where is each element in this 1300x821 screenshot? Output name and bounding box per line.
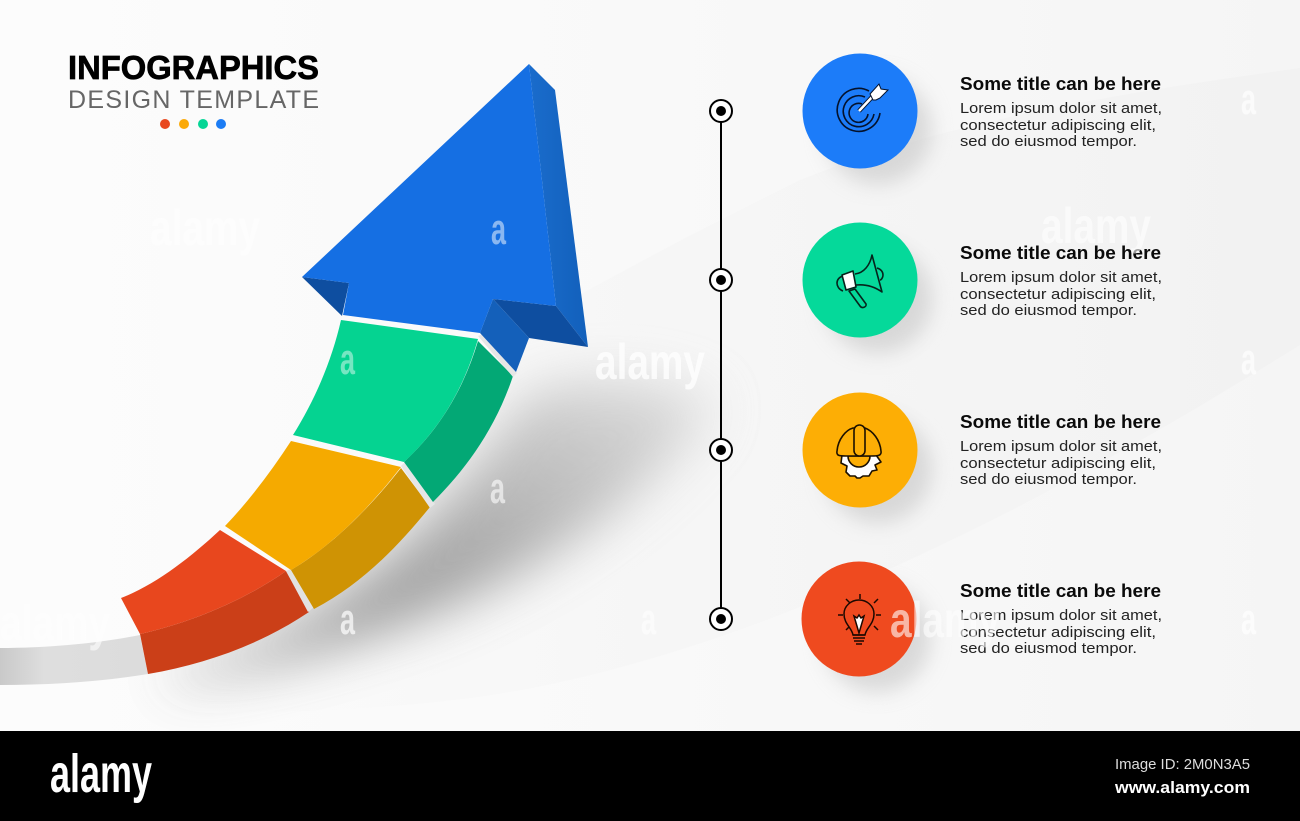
icon: light bulb	[838, 594, 881, 644]
item 2 text: sed do eiusmod tempor.	[960, 303, 1137, 319]
item 1 text: Lorem ipsum dolor sit amet,	[960, 101, 1162, 117]
watermarks: a	[1241, 335, 1256, 384]
item 3 text: Lorem ipsum dolor sit amet,	[960, 439, 1162, 455]
green segment	[293, 320, 517, 502]
grey ground ribbon	[0, 635, 148, 685]
title: INFOGRAPHICS	[68, 49, 319, 86]
image id: Image ID: 2M0N3A5	[1115, 756, 1250, 773]
watermarks: a	[1241, 595, 1256, 644]
item 1 text: sed do eiusmod tempor.	[960, 134, 1137, 150]
blue arrow head	[302, 64, 588, 372]
item 2 text: Some title can be here	[960, 243, 1161, 263]
item 4 text: Some title can be here	[960, 581, 1161, 601]
watermarks: a	[491, 205, 506, 254]
watermarks: a	[641, 595, 656, 644]
item 1 text: consectetur adipiscing elit,	[960, 118, 1156, 134]
icon: hard hat and gear	[837, 425, 881, 478]
item 3: yellow circle with helmet icon	[802, 392, 932, 523]
item 4: red circle with light bulb icon	[802, 562, 931, 692]
item 3 text: consectetur adipiscing elit,	[960, 456, 1156, 472]
watermarks: alamy	[595, 334, 705, 390]
subtitle: DESIGN TEMPLATE	[68, 86, 319, 114]
item 1: blue circle with target icon	[802, 54, 932, 184]
item 4 text: sed do eiusmod tempor.	[960, 641, 1137, 657]
title block	[68, 49, 319, 129]
item 4 text: Lorem ipsum dolor sit amet,	[960, 608, 1162, 624]
item 1 text: Some title can be here	[960, 74, 1161, 94]
watermarks: a	[340, 595, 355, 644]
watermarks: alamy	[150, 200, 260, 256]
watermarks: alamy	[1041, 198, 1151, 254]
item 2 text: consectetur adipiscing elit,	[960, 287, 1156, 303]
yellow segment	[225, 441, 435, 609]
timeline node 2	[710, 269, 732, 291]
watermarks: a	[340, 335, 355, 384]
watermarks: a	[490, 464, 505, 513]
timeline node 1	[710, 100, 732, 122]
item 1 text	[960, 74, 1162, 150]
timeline node 3	[710, 439, 732, 461]
red segment	[121, 530, 314, 674]
timeline node 4	[710, 608, 732, 630]
icon: megaphone	[837, 255, 883, 307]
watermarks: a	[1241, 75, 1256, 124]
3D growth arrow	[0, 64, 588, 685]
item 2 text	[960, 243, 1162, 319]
watermarks: alamy	[890, 592, 1000, 648]
item 4 text	[960, 581, 1162, 657]
item 3 text	[960, 412, 1162, 488]
item 4 text: consectetur adipiscing elit,	[960, 625, 1156, 641]
colour dots	[160, 119, 226, 129]
watermarks: alamy	[0, 595, 110, 651]
item 2 text: Lorem ipsum dolor sit amet,	[960, 270, 1162, 286]
timeline	[710, 100, 732, 630]
shadow under arrow	[170, 379, 715, 680]
item 3 text: sed do eiusmod tempor.	[960, 472, 1137, 488]
website: www.alamy.com	[1114, 778, 1250, 797]
footer bar	[0, 731, 1300, 821]
watermarks	[0, 75, 1256, 651]
item 3 text: Some title can be here	[960, 412, 1161, 432]
item 2: green circle with megaphone icon	[802, 222, 932, 353]
footer logo: alamy	[50, 744, 152, 804]
icon: target and dart	[837, 84, 888, 131]
